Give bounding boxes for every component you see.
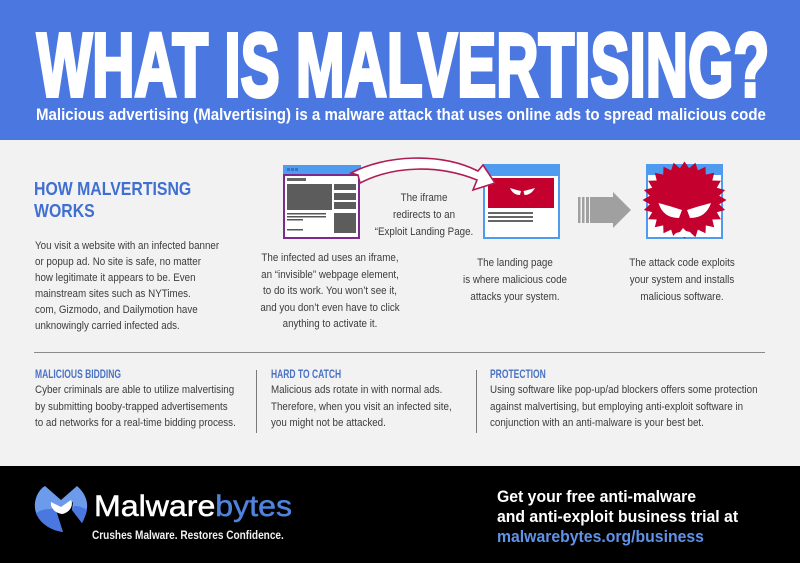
icon: infected browser window xyxy=(283,165,361,238)
panel: hard to catch xyxy=(271,369,452,429)
heading: MALICIOUS BIDDING xyxy=(35,369,121,381)
icon: exploit burst over browser xyxy=(642,162,726,238)
body text xyxy=(271,384,452,429)
arrow: iframe redirect xyxy=(351,158,495,190)
section heading: how malvertisng works: WORKS xyxy=(34,201,95,221)
logo wordmark: Malwarebytes xyxy=(94,490,292,523)
iframe caption: “Exploit Landing Page. xyxy=(375,226,473,238)
body text: conjunction with an anti-malware is your best bet. xyxy=(490,417,704,429)
intro text: com, Gizmodo, and Dailymotion have xyxy=(35,304,198,316)
body text: you might not be attacked. xyxy=(271,417,386,429)
header banner xyxy=(0,0,800,140)
body text: to ad networks for a real-time bidding process. xyxy=(35,417,236,429)
intro text: unknowingly carried infected ads. xyxy=(35,320,180,332)
body text: Malicious ads rotate in with normal ads. xyxy=(271,384,442,396)
intro text: You visit a website with an infected banner xyxy=(35,240,219,252)
call to action: Get your free anti-malware xyxy=(497,486,696,506)
iframe caption: The iframe xyxy=(401,192,447,204)
step 1 caption: and you don’t even have to click xyxy=(260,302,400,314)
step 2 caption: attacks your system. xyxy=(470,291,560,303)
body text xyxy=(35,384,236,429)
intro text: how legitimate it appears to be. Even xyxy=(35,272,196,284)
intro text: or popup ad. No site is safe, no matter xyxy=(35,256,201,268)
tagline: Crushes Malware. Restores Confidence. xyxy=(92,530,284,542)
step 2 caption: is where malicious code xyxy=(463,274,567,286)
body text: Cyber criminals are able to utilize malvertising xyxy=(35,384,234,396)
step 3 caption: your system and installs xyxy=(630,274,734,286)
step 2 caption: The landing page xyxy=(477,257,553,269)
step 1 caption: The infected ad uses an iframe, xyxy=(261,252,399,264)
step 1 caption: to do its work. You won’t see it, xyxy=(263,285,397,297)
step 3 caption: malicious software. xyxy=(640,291,724,303)
body text: by submitting booby-trapped advertisements xyxy=(35,400,228,412)
intro text: mainstream sites such as NYTimes. xyxy=(35,288,191,300)
icon: malwarebytes logo xyxy=(34,486,88,532)
subtitle: Malicious advertising (Malvertising) is a malware attack that uses online ads to spread malicious code xyxy=(36,105,766,124)
arrow: grey next xyxy=(578,192,631,228)
iframe caption: redirects to an xyxy=(393,209,455,221)
step 1 caption: anything to activate it. xyxy=(283,318,377,330)
call to action xyxy=(497,486,738,546)
panel: malicious bidding xyxy=(35,369,236,429)
diagram: malvertising flow xyxy=(283,157,726,239)
body text: Therefore, when you visit an infected site, xyxy=(271,400,452,412)
heading: HARD TO CATCH xyxy=(271,369,341,381)
icon: landing page browser window xyxy=(484,165,559,238)
call to action: and anti-exploit business trial at xyxy=(497,506,738,526)
body text: Using software like pop-up/ad blockers offers some protection xyxy=(490,384,758,396)
intro text xyxy=(35,240,219,332)
body text xyxy=(490,384,758,429)
body text: against malvertising, but employing anti-exploit software in xyxy=(490,400,743,412)
title: WHAT IS MALVERTISING? xyxy=(37,16,769,116)
step 3 caption xyxy=(629,257,735,303)
divider xyxy=(34,352,765,353)
call to action: malwarebytes.org/business xyxy=(497,526,704,546)
panel: footer xyxy=(0,466,800,563)
step 1 caption xyxy=(260,252,400,330)
iframe caption xyxy=(375,192,473,238)
panel: protection xyxy=(490,369,758,429)
heading: PROTECTION xyxy=(490,369,546,381)
step 2 caption xyxy=(463,257,567,303)
section heading: how malvertisng works: HOW MALVERTISNG xyxy=(34,179,191,199)
step 1 caption: an “invisible” webpage element, xyxy=(261,268,399,280)
section heading: how malvertisng works xyxy=(34,179,191,221)
step 3 caption: The attack code exploits xyxy=(629,257,735,269)
